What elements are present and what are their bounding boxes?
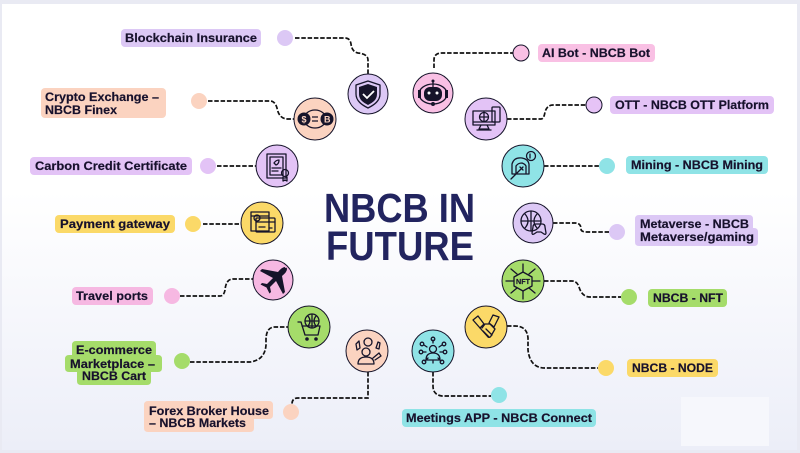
item: Mining	[502, 145, 768, 187]
item: Travel ports	[72, 260, 293, 305]
item: NODE: NBCB - NODE	[632, 361, 713, 375]
item: Forex Broker House	[144, 330, 388, 432]
item: OTT Platform	[465, 96, 774, 140]
item: Carbon Credit Certificate	[30, 145, 298, 187]
item: Metaverse	[513, 203, 758, 246]
item: OTT Platform: OTT - NBCB OTT Platform	[615, 98, 769, 112]
item: Crypto Exchange: $	[302, 114, 307, 124]
item: NFT	[502, 260, 727, 307]
item: Blockchain Insurance	[121, 29, 388, 114]
item: Blockchain Insurance: Blockchain Insurance	[125, 31, 257, 45]
item: Payment gateway	[55, 202, 283, 244]
item: E-commerce Marketplace - NBCB Cart: Marketplace –	[70, 357, 155, 371]
item: E-commerce Marketplace - NBCB Cart	[65, 306, 330, 385]
item: Payment gateway: Payment gateway	[60, 217, 170, 231]
item: Forex Broker House: Forex Broker House	[149, 404, 269, 418]
item: NFT: NBCB - NFT	[653, 291, 724, 305]
item: Meetings APP	[402, 330, 596, 427]
item: E-commerce Marketplace - NBCB Cart: E-commerce	[76, 343, 152, 357]
item: Forex Broker House: – NBCB Markets	[149, 416, 246, 430]
item: Crypto Exchange: B	[324, 114, 331, 124]
item: E-commerce Marketplace - NBCB Cart: NBCB Cart	[82, 369, 146, 383]
item: Crypto Exchange: Crypto Exchange –	[45, 90, 159, 104]
title: FUTURE	[326, 223, 474, 269]
item: Travel ports: Travel ports	[76, 289, 148, 303]
item: Carbon Credit Certificate: Carbon Credit Certificate	[35, 159, 187, 173]
item: Metaverse: Metaverse/gaming	[640, 230, 754, 244]
item: Crypto Exchange: NBCB Finex	[45, 103, 117, 117]
item: Metaverse: Metaverse - NBCB	[640, 217, 749, 231]
item: Mining: Mining - NBCB Mining	[631, 158, 763, 172]
item: AI Bot	[413, 44, 655, 113]
item: NFT: NFT	[516, 279, 531, 286]
item: Meetings APP: Meetings APP - NBCB Connect	[406, 411, 592, 425]
title: NBCB IN	[324, 185, 475, 231]
item: AI Bot: AI Bot - NBCB Bot	[542, 46, 650, 60]
item: Crypto Exchange	[41, 88, 336, 140]
title	[324, 185, 475, 269]
item: NODE	[465, 306, 718, 377]
